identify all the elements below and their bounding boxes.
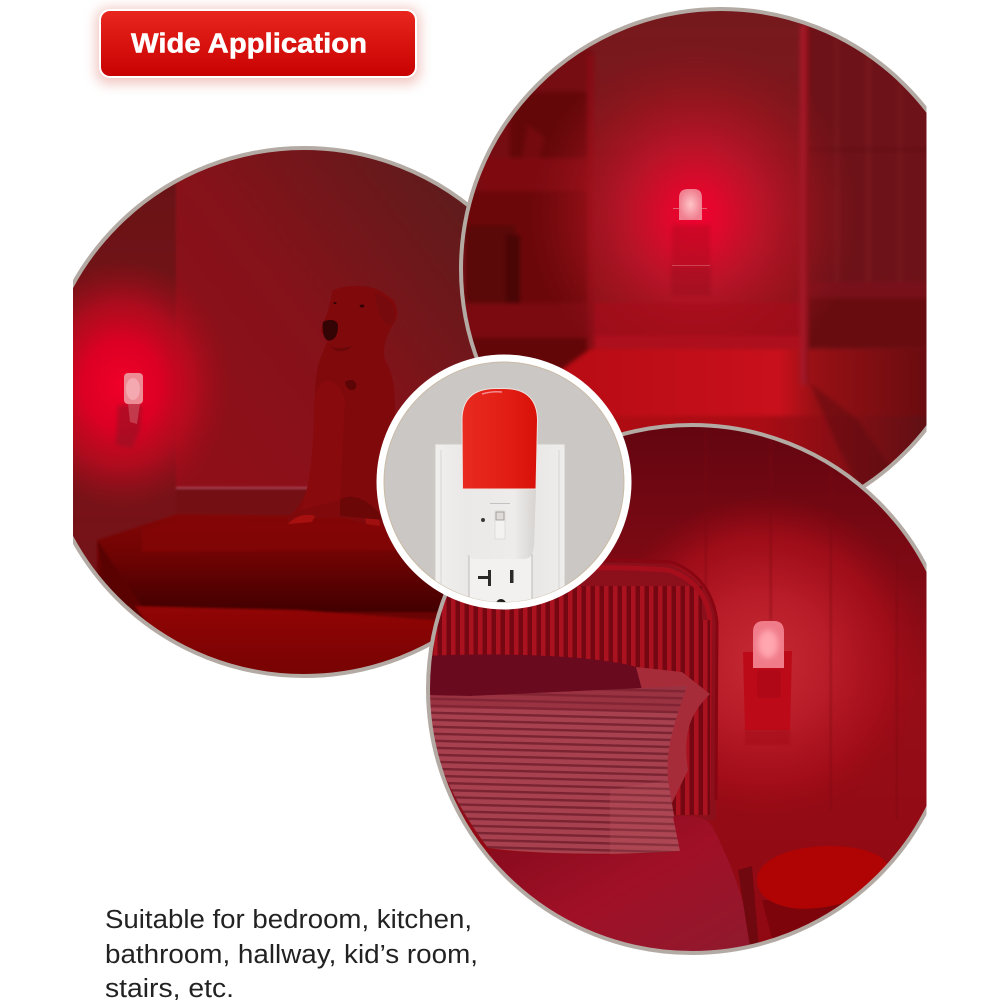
pillows [425,654,710,855]
night light red cover [462,388,538,489]
wall night light [116,373,143,448]
description text [105,906,478,1000]
night light white base [464,488,536,559]
photo circle: dog on carpeted stairs [73,146,475,678]
description text: Suitable for bedroom, kitchen, [105,906,472,934]
badge: Wide Application: Wide Application [131,28,367,58]
center circle: product close-up [376,354,632,615]
badge: Wide Application [96,8,420,84]
hallway night light [679,189,702,220]
headboard [434,560,717,820]
description text: bathroom, hallway, kid’s room, [105,941,478,969]
bed [488,816,755,960]
photo circle: hallway with night light [459,7,926,488]
side table [738,846,888,944]
bedroom night light with plate [743,621,792,745]
outlet [468,554,532,602]
dog [286,286,397,526]
photo circle: bedroom with headboard and pillows [426,423,926,955]
wall switch plate [435,444,565,610]
